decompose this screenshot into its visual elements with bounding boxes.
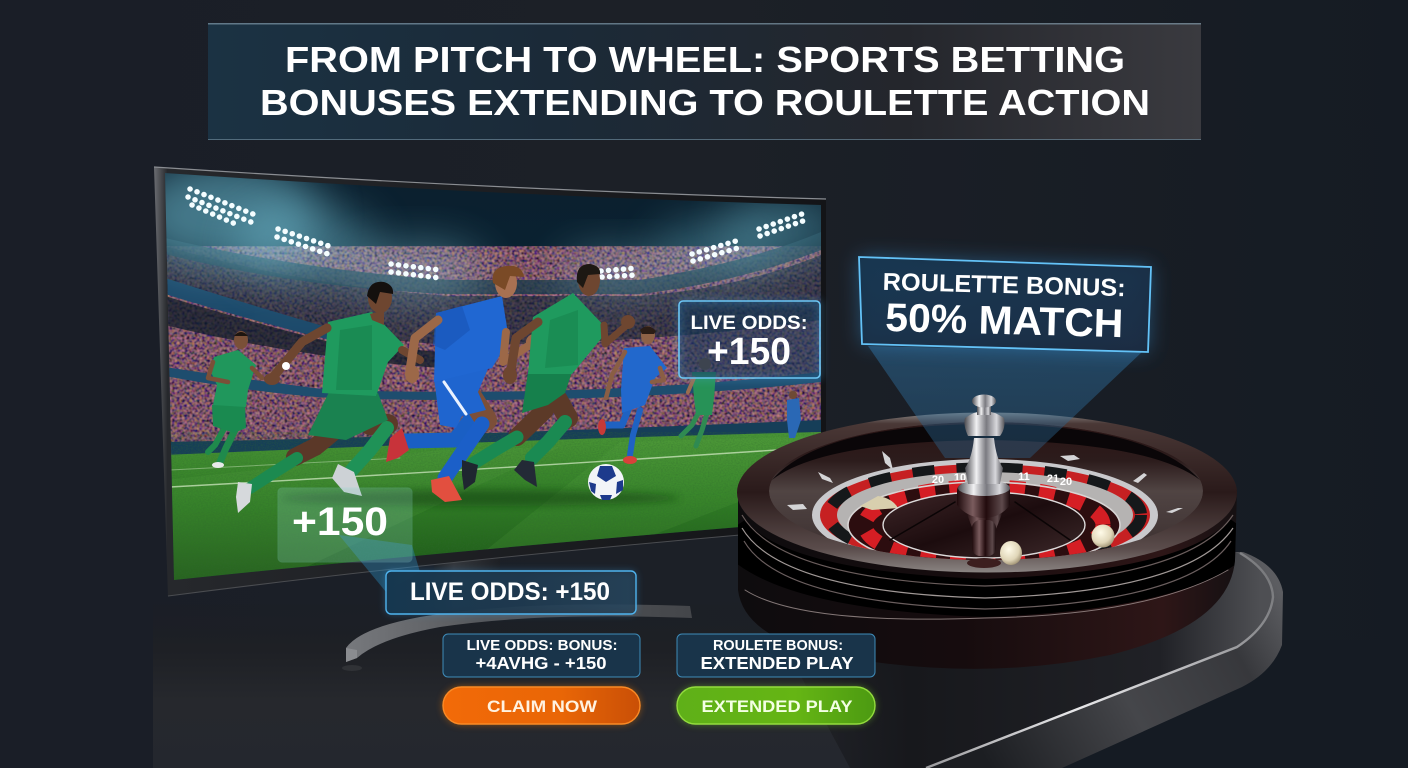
title text: FROM PITCH TO WHEEL: SPORTS BETTING xyxy=(285,39,1125,80)
button: extended play xyxy=(677,687,875,724)
live odds label: LIVE ODDS: +150 xyxy=(410,578,610,606)
outer rim xyxy=(737,412,1237,572)
panel: roulette bonus extended play xyxy=(677,634,875,677)
stadium roof band xyxy=(165,232,821,294)
roulette bonus panel: 50% MATCH xyxy=(885,296,1124,346)
stacked rings xyxy=(730,515,1245,609)
background player: far green xyxy=(681,358,716,446)
roulette bonus panel xyxy=(859,257,1151,352)
floodlights xyxy=(188,189,803,278)
button: claim now xyxy=(443,687,640,724)
background player: far blue xyxy=(787,391,801,438)
roulette wheel xyxy=(730,346,1245,669)
ball track markers xyxy=(787,451,1183,513)
bonus text: ROULETTE BONUS: xyxy=(882,269,1126,302)
TV monitor xyxy=(130,160,842,596)
number ring: 21 xyxy=(1047,473,1059,485)
background player: blue right xyxy=(598,326,667,464)
monitor frame xyxy=(154,167,826,596)
live odds label xyxy=(386,571,636,614)
number ring: 11 xyxy=(1018,471,1030,483)
wheel base xyxy=(738,490,1237,669)
on-screen odds panel: live odds: LIVE ODDS: xyxy=(690,313,808,334)
floodlight glow xyxy=(130,160,842,302)
icon: soccer ball xyxy=(588,464,624,500)
panel: live odds bonus: +4AVHG - +150 xyxy=(476,653,607,673)
crowd stands xyxy=(165,246,821,458)
panel: live odds bonus xyxy=(443,634,640,677)
wheel spindle xyxy=(957,394,1010,568)
screen: stadium scene xyxy=(165,173,821,580)
ball shadow and grass shadow xyxy=(280,490,680,506)
beam: roulette projection xyxy=(868,346,1142,458)
TV stand xyxy=(342,550,692,671)
background player: green left xyxy=(208,331,262,468)
number ring: 10 xyxy=(954,472,966,484)
button: extended play: EXTENDED PLAY xyxy=(702,697,853,716)
number labels: 20 xyxy=(932,474,944,486)
pocket ring xyxy=(848,482,1120,568)
player: big green left xyxy=(236,282,420,513)
player: big green right xyxy=(462,264,635,490)
beam: odds projection xyxy=(339,535,420,592)
on-screen odds panel: +150: +150 xyxy=(292,500,388,544)
center cone xyxy=(883,492,1085,558)
title banner: BONUSES EXTENDING TO ROULETTE ACTION xyxy=(260,82,1150,123)
number ring: 20 xyxy=(1060,476,1072,488)
pitch xyxy=(165,432,825,592)
button: claim now: CLAIM NOW xyxy=(487,697,598,716)
bowl xyxy=(769,422,1203,571)
icon: roulette balls xyxy=(1000,524,1114,565)
panel: roulette bonus extended play: EXTENDED PLAY xyxy=(700,653,854,673)
on-screen odds panel: +150 xyxy=(278,488,412,562)
table surface xyxy=(760,552,1283,768)
number ring xyxy=(812,459,1158,571)
on-screen odds panel: live odds: +150 xyxy=(707,331,791,373)
panel: roulette bonus extended play: ROULETE BONUS: xyxy=(713,638,843,654)
on-screen odds panel: live odds xyxy=(679,301,820,378)
title banner xyxy=(208,23,1201,140)
panel: live odds bonus: LIVE ODDS: BONUS: xyxy=(466,638,618,654)
player: blue center xyxy=(386,266,542,502)
